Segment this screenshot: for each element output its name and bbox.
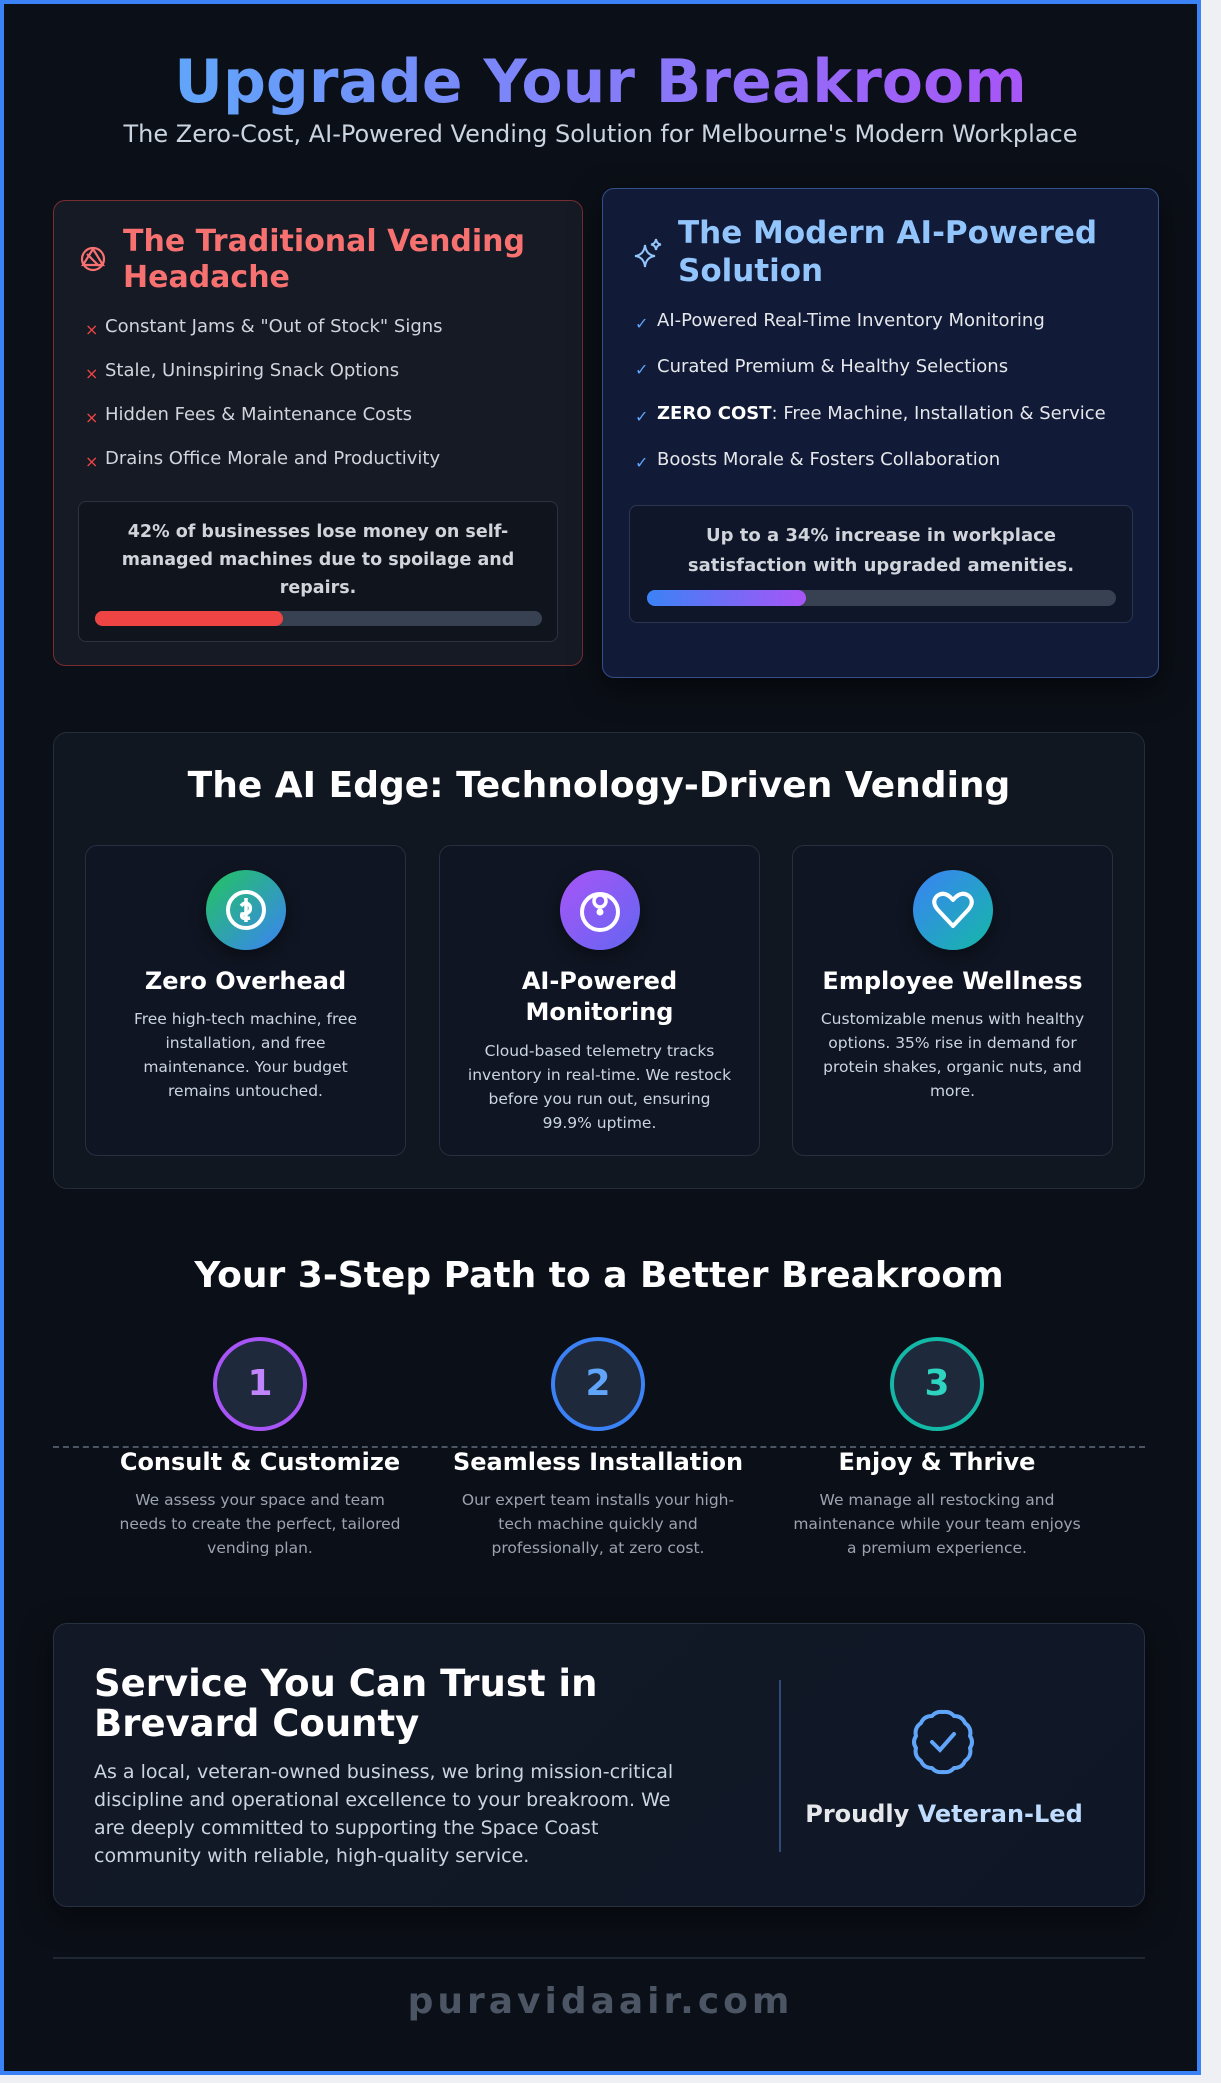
list: problems: Stale, Uninspiring Snack Options	[105, 360, 399, 381]
list: benefits: AI-Powered Real-Time Inventory Monitoring	[657, 310, 1045, 331]
step 1: 1	[247, 1363, 273, 1404]
bar: 42%	[95, 611, 542, 626]
list: benefits	[635, 310, 1106, 472]
bar: 34%	[647, 590, 1116, 606]
list: problems: Drains Office Morale and Productivity	[105, 448, 440, 469]
icon: badge check	[912, 1710, 974, 1774]
list: benefits: ZERO COST: Free Machine, Installation & Service	[657, 403, 1106, 424]
list: benefits: Curated Premium & Healthy Selections	[657, 356, 1008, 377]
card: wellness: Employee Wellness	[822, 967, 1083, 995]
heading: steps: Your 3-Step Path to a Better Breakroom	[194, 1255, 1004, 1296]
step 2: 2	[585, 1363, 611, 1404]
list: problems: Constant Jams & "Out of Stock" Signs	[105, 316, 443, 337]
body text: As a local, veteran-owned business, we bring mission-critical discipline and operational excellence to your breakroom. We are deeply committed to supporting the Space Coast community with reliable, high-quality service.	[94, 1761, 673, 1867]
step 2: Our expert team installs your high-tech machine quickly and professionally, at zero cost.	[462, 1491, 734, 1557]
card: AI monitoring: Cloud-based telemetry tracks inventory in real-time. We restock before you run out, ensuring 99.9% uptime.	[468, 1042, 731, 1132]
step 2: Seamless Installation	[453, 1448, 743, 1476]
icon: chip	[560, 870, 640, 950]
card: wellness: Customizable menus with healthy options. 35% rise in demand for protein shakes, organic nuts, and more.	[821, 1010, 1084, 1100]
step 1	[120, 1337, 400, 1557]
stat box: 34%	[629, 505, 1133, 623]
panel: trust	[53, 1623, 1145, 1907]
step 3: We manage all restocking and maintenance while your team enjoys a premium experience.	[793, 1491, 1081, 1557]
subtitle: The Zero-Cost, AI-Powered Vending Solution for Melbourne's Modern Workplace	[123, 120, 1078, 148]
heading: Solution	[678, 253, 823, 289]
heading: AI edge: The AI Edge: Technology-Driven Vending	[188, 765, 1010, 806]
card: zero overhead: Zero Overhead	[145, 967, 346, 995]
panel: modern solution	[602, 188, 1159, 678]
list: problems: Hidden Fees & Maintenance Costs	[105, 404, 412, 425]
card: wellness	[792, 845, 1113, 1156]
card: AI monitoring	[439, 845, 760, 1156]
step 3	[793, 1337, 1081, 1557]
step 1: Consult & Customize	[120, 1448, 400, 1476]
icon: dollar	[206, 870, 286, 950]
heading: Brevard County	[94, 1702, 419, 1745]
panel: traditional headache: ×	[85, 408, 98, 427]
panel: traditional headache	[53, 200, 583, 666]
panel: modern solution: ✓	[635, 360, 648, 379]
heading: Headache	[123, 260, 290, 295]
step 2	[453, 1337, 743, 1557]
stat box: 42%: 42% of businesses lose money on self-managed machines due to spoilage and repairs.	[122, 522, 514, 598]
panel: AI edge	[53, 732, 1145, 1189]
panel: traditional headache: ×	[85, 364, 98, 383]
step 3: Enjoy & Thrive	[839, 1448, 1035, 1476]
stat box: 34%: Up to a 34% increase in workplace satisfaction with upgraded amenities.	[688, 525, 1074, 576]
list: benefits: Boosts Morale & Fosters Collaboration	[657, 449, 1000, 470]
stat box: 42%	[78, 501, 558, 642]
badge label: Proudly Veteran-Led	[805, 1800, 1083, 1828]
card: AI monitoring: AI-Powered	[522, 967, 677, 995]
panel: modern solution: ✓	[635, 453, 648, 472]
step 3: 3	[924, 1363, 950, 1404]
heading	[678, 215, 1097, 289]
heading	[94, 1662, 597, 1745]
heading: The Traditional Vending	[123, 224, 525, 259]
panel: modern solution: ✓	[635, 314, 648, 333]
title: Upgrade Your Breakroom	[174, 47, 1027, 117]
footer: website: puravidaair.com	[408, 1981, 793, 2022]
panel: traditional headache: ×	[85, 452, 98, 471]
heading	[123, 224, 525, 295]
card: zero overhead: Free high-tech machine, free installation, and free maintenance. Your budget remains untouched.	[134, 1010, 357, 1100]
icon: heart	[913, 870, 993, 950]
panel: traditional headache: ×	[85, 320, 98, 339]
step 1: We assess your space and team needs to create the perfect, tailored vending plan.	[120, 1491, 400, 1557]
panel: modern solution: ✓	[635, 407, 648, 426]
icon: sparkles	[634, 238, 662, 268]
heading: Service You Can Trust in	[94, 1662, 597, 1705]
card: AI monitoring: Monitoring	[526, 998, 673, 1026]
icon: warning	[80, 246, 106, 272]
card: zero overhead	[85, 845, 406, 1156]
list: problems	[85, 316, 443, 471]
heading: The Modern AI-Powered	[678, 215, 1097, 251]
